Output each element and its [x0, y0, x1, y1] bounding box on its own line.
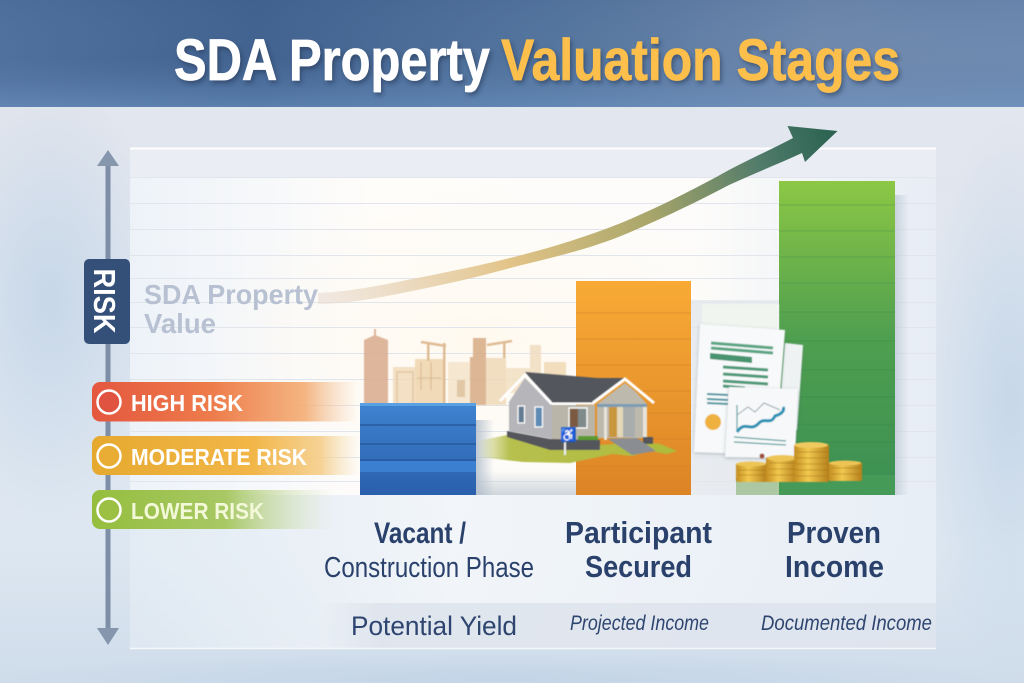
stage label: participant: Secured — [585, 549, 692, 584]
roof — [525, 372, 625, 403]
stage label: vacant: Vacant / — [374, 517, 467, 550]
foundation — [507, 431, 600, 450]
windows and door — [518, 406, 524, 423]
stage label: vacant: Construction Phase — [324, 552, 534, 584]
stage label: proven income: Proven — [787, 515, 881, 550]
high risk pill: HIGH RISK — [131, 390, 243, 416]
chart axis label: SDA Property Value — [144, 279, 318, 339]
growth arrow — [318, 126, 838, 304]
porch gable wall — [597, 383, 647, 438]
main report sheet — [694, 324, 785, 455]
risk badge — [84, 259, 130, 344]
bar: proven income stage (green) — [736, 181, 895, 495]
stage label: vacant — [324, 517, 534, 584]
accessibility sign — [564, 442, 566, 455]
risk badge: RISK — [87, 268, 122, 334]
title: Valuation Stages — [501, 28, 900, 93]
risk level labels — [92, 382, 360, 529]
yield label: potential: Potential Yield — [351, 611, 517, 641]
stage label: proven income — [785, 515, 884, 584]
chart axis label: SDA Property Value: Value — [144, 308, 216, 339]
stage label: participant — [565, 515, 712, 584]
risk axis arrow — [97, 150, 119, 645]
moderate risk pill: MODERATE RISK — [131, 444, 307, 470]
moderate risk pill — [92, 436, 360, 475]
gold coin stacks — [736, 442, 862, 482]
stage label: proven income: Income — [785, 549, 884, 584]
bar: vacant stage (blue) — [360, 403, 476, 495]
back sheets — [702, 304, 779, 330]
header band — [0, 0, 1024, 107]
chart sheet — [725, 387, 798, 458]
title: SDA Property — [174, 28, 490, 93]
front wall — [552, 405, 595, 440]
title — [174, 28, 900, 93]
chart panel — [130, 148, 936, 495]
yield label: documented: Documented Income — [761, 612, 932, 635]
lawn — [478, 435, 677, 463]
illustration: accessible house — [478, 372, 677, 463]
yield label: projected: Projected Income — [570, 612, 709, 635]
illustration: accessible house: ♿ — [560, 428, 577, 442]
illustration: documents — [694, 304, 862, 482]
chart axis label: SDA Property Value: SDA Property — [144, 279, 318, 310]
high risk pill — [92, 382, 358, 422]
lower risk pill — [92, 490, 335, 529]
construction skyline — [364, 329, 566, 405]
lower risk pill: LOWER RISK — [131, 498, 264, 524]
bar: participant stage (orange) — [576, 281, 691, 495]
stage label: participant: Participant — [565, 515, 712, 550]
ramp — [608, 438, 656, 455]
side wall — [509, 378, 552, 439]
lower label panel — [130, 495, 936, 648]
